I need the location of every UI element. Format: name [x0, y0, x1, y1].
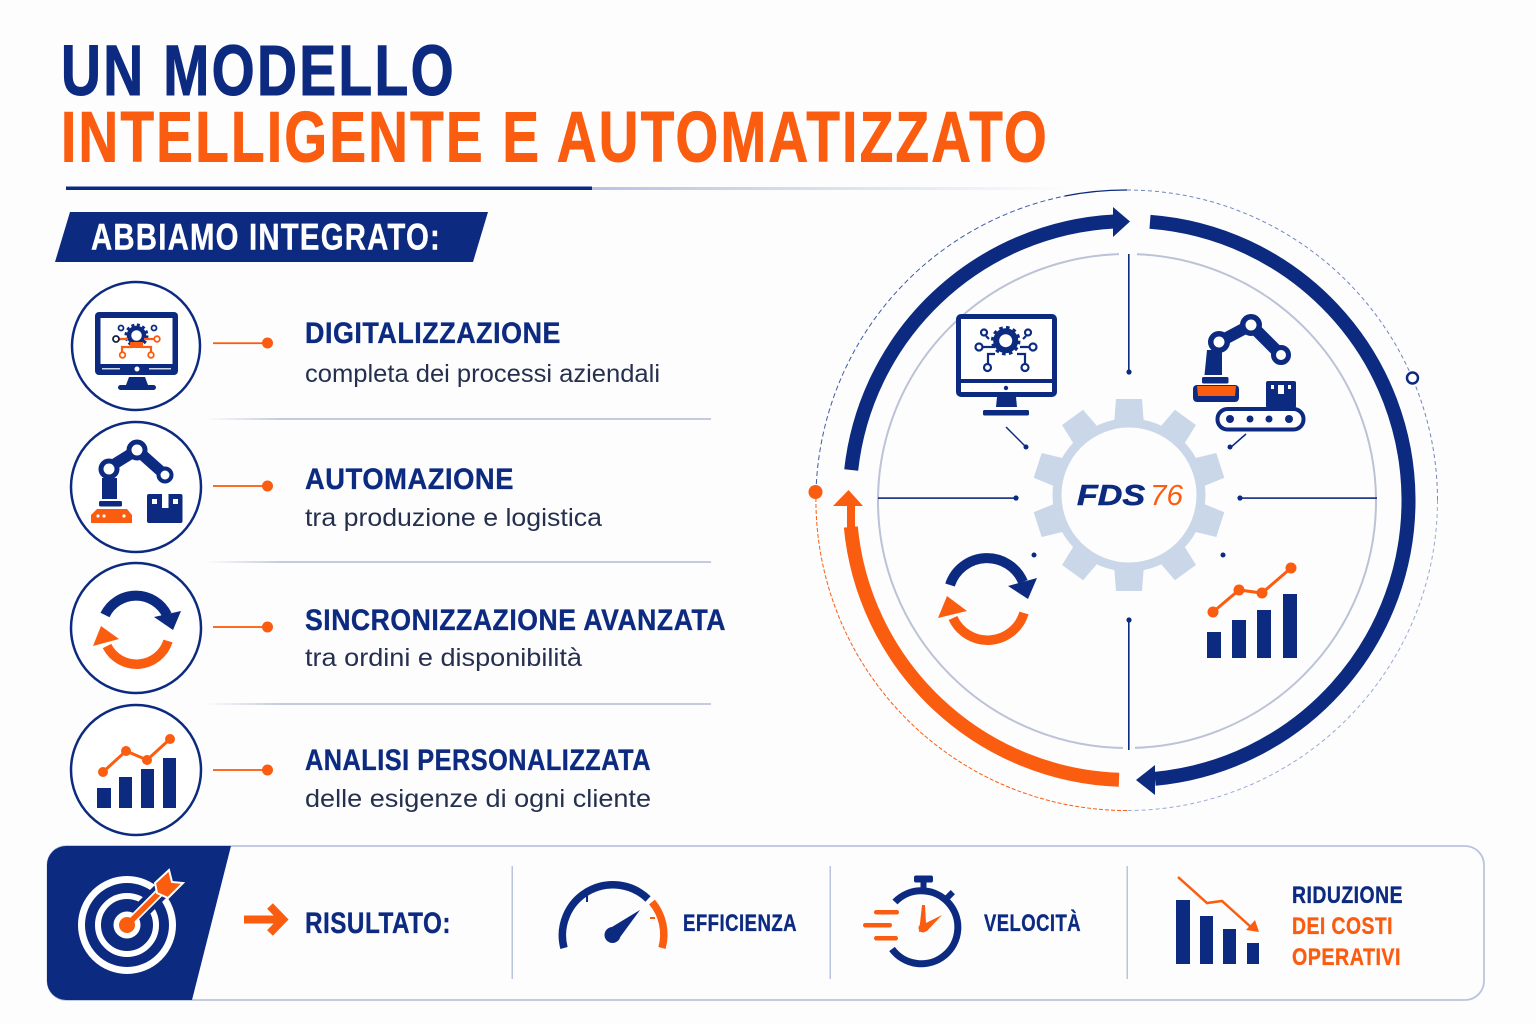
text: analisi: ANALISI PERSONALIZZATA — [305, 744, 651, 777]
row: digitalizzazione — [72, 282, 660, 410]
text: sincronizzazione — [305, 604, 726, 672]
arc: orange return arrow — [833, 490, 1119, 780]
icon: target panel — [47, 846, 231, 1000]
title: UN MODELLO — [61, 32, 456, 111]
label: riduzione dei costi operativi: RIDUZIONE — [1292, 882, 1403, 909]
text: analisi — [305, 744, 651, 813]
icon: central robot and conveyor — [1193, 317, 1304, 430]
logo — [1077, 480, 1184, 512]
label: efficienza: EFFICIENZA — [683, 910, 797, 937]
row: automazione — [71, 422, 602, 552]
icon: robot arm — [71, 422, 201, 552]
inner ring — [878, 250, 1376, 752]
label: riduzione dei costi operativi — [1292, 882, 1403, 971]
connector — [213, 622, 273, 632]
label: risultato: RISULTATO: — [305, 907, 451, 940]
text: digitalizzazione: DIGITALIZZAZIONE — [305, 317, 561, 350]
label: velocita: VELOCITÀ — [984, 909, 1081, 937]
icon: sync arrows — [71, 563, 201, 693]
text: automazione: AUTOMAZIONE — [305, 463, 514, 496]
connector — [213, 480, 273, 492]
label: riduzione dei costi operativi: DEI COSTI — [1292, 913, 1393, 940]
row: sincronizzazione — [71, 563, 726, 693]
label: riduzione dei costi operativi: OPERATIVI — [1292, 944, 1401, 971]
heading banner: abbiamo integrato: ABBIAMO INTEGRATO: — [91, 216, 441, 258]
icon: speedometer — [562, 885, 664, 948]
arc: blue top-left arrow — [851, 207, 1130, 470]
icon: falling cost bars — [1176, 877, 1259, 964]
text: sincronizzazione: tra ordini e disponibilità — [305, 644, 582, 672]
text: analisi: delle esigenze di ogni cliente — [305, 785, 651, 813]
heading banner: abbiamo integrato — [55, 212, 488, 262]
text: sincronizzazione: SINCRONIZZAZIONE AVANZATA — [305, 604, 726, 637]
text: digitalizzazione: completa dei processi aziendali — [305, 360, 660, 388]
logo: 76 — [1150, 480, 1184, 512]
row: analisi — [71, 705, 651, 835]
logo: FDS — [1077, 480, 1146, 512]
outer dashed orbit — [808, 190, 1438, 810]
arrow — [244, 906, 283, 933]
central gear with logo — [1033, 399, 1225, 591]
title — [61, 32, 1049, 178]
icon: stopwatch — [863, 876, 958, 964]
icon: central sync — [938, 558, 1037, 640]
text: automazione: tra produzione e logistica — [305, 504, 602, 532]
icon: central chart — [1207, 562, 1297, 658]
connector — [213, 764, 273, 776]
icon: growth chart — [71, 705, 201, 835]
panel: risultato bar — [47, 846, 1484, 1000]
text: digitalizzazione — [305, 317, 660, 388]
title: INTELLIGENTE E AUTOMATIZZATO — [61, 98, 1049, 178]
text: automazione — [305, 463, 602, 532]
diagram: FDS76 cycle — [808, 190, 1438, 810]
spokes — [878, 254, 1377, 750]
connector — [213, 338, 273, 348]
arc: blue right arrow — [1136, 222, 1409, 795]
icon: monitor with circuit gear — [72, 282, 200, 410]
icon: central monitor — [956, 314, 1057, 416]
